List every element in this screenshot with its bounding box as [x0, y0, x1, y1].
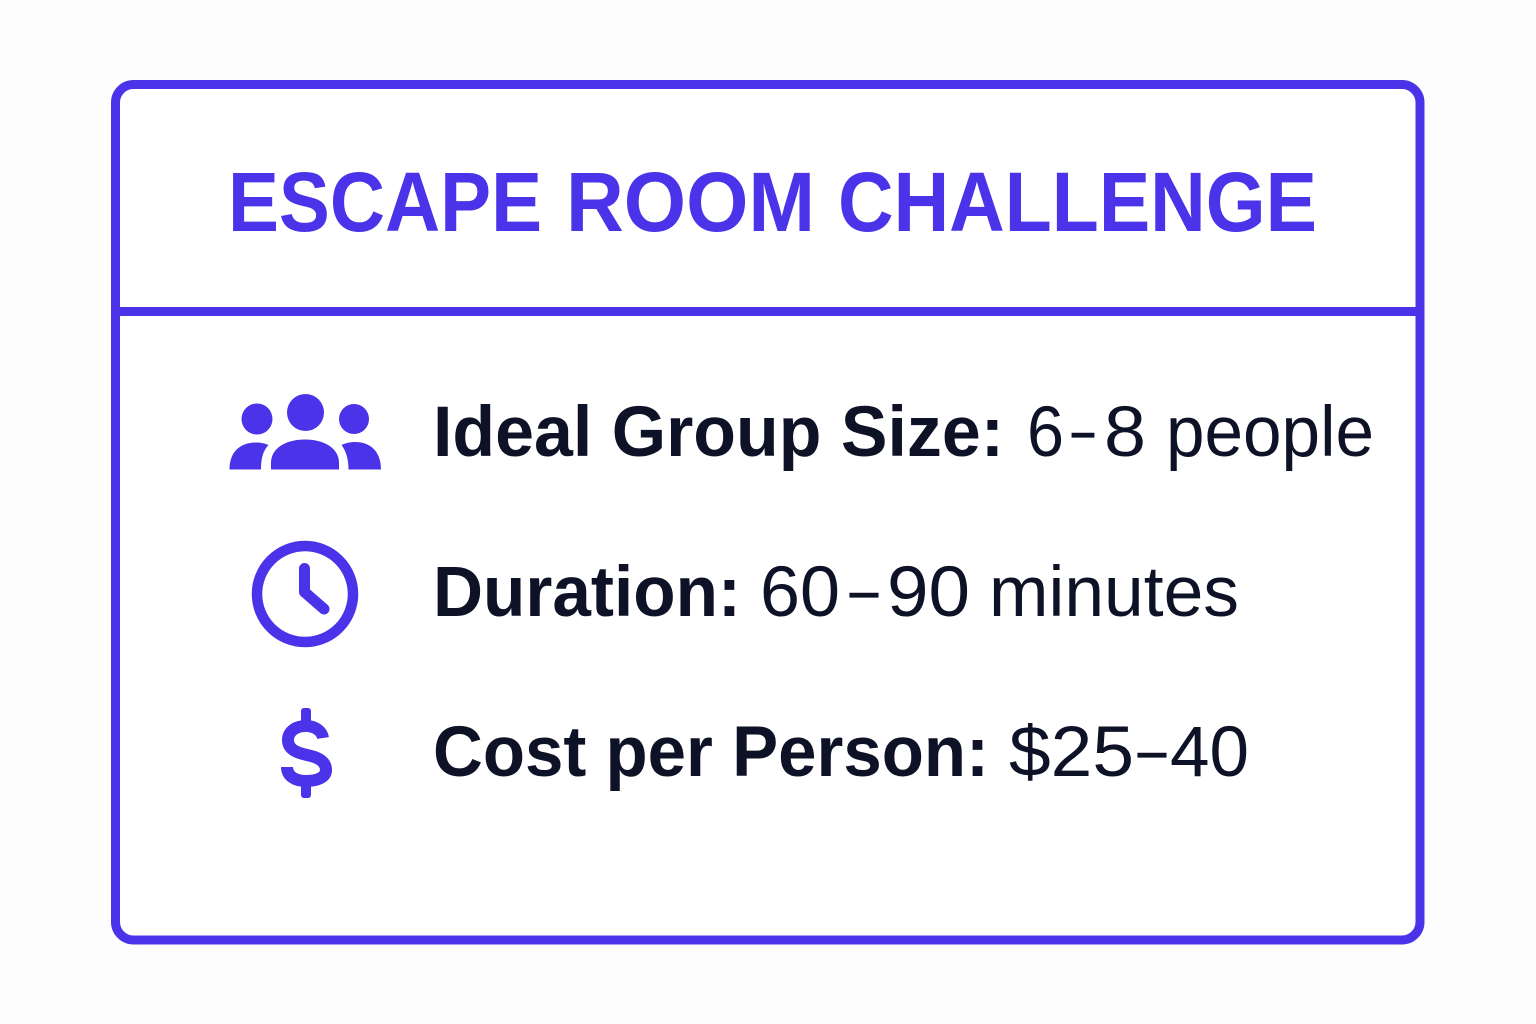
- row: cost: Cost per Person:: [433, 713, 989, 792]
- row: duration: minutes: [989, 553, 1239, 632]
- row: group size: people: [1166, 393, 1374, 472]
- row: group size: 6: [1027, 393, 1064, 472]
- title: [228, 155, 1317, 249]
- title: ESCAPE: [228, 155, 542, 249]
- row: duration: 90: [887, 553, 970, 632]
- row: duration: Duration:: [433, 553, 741, 632]
- title: ROOM: [566, 155, 815, 249]
- row: group size: 8: [1104, 393, 1146, 472]
- row: cost: $25: [1009, 713, 1134, 792]
- icon: clock: [257, 546, 353, 642]
- row: group size: [433, 393, 1374, 472]
- row: cost: 40: [1170, 713, 1249, 792]
- row: duration: [433, 553, 1239, 632]
- row: duration: –: [850, 561, 878, 621]
- row: group size: Ideal Group Size:: [433, 393, 1004, 472]
- row: cost: –: [1138, 721, 1166, 781]
- row: duration: 60: [760, 553, 840, 632]
- row: group size: –: [1072, 401, 1094, 461]
- icon: dollar sign: [287, 708, 326, 798]
- title: CHALLENGE: [838, 155, 1317, 249]
- panel: card: [116, 84, 1420, 940]
- icon: group of people: [230, 394, 381, 470]
